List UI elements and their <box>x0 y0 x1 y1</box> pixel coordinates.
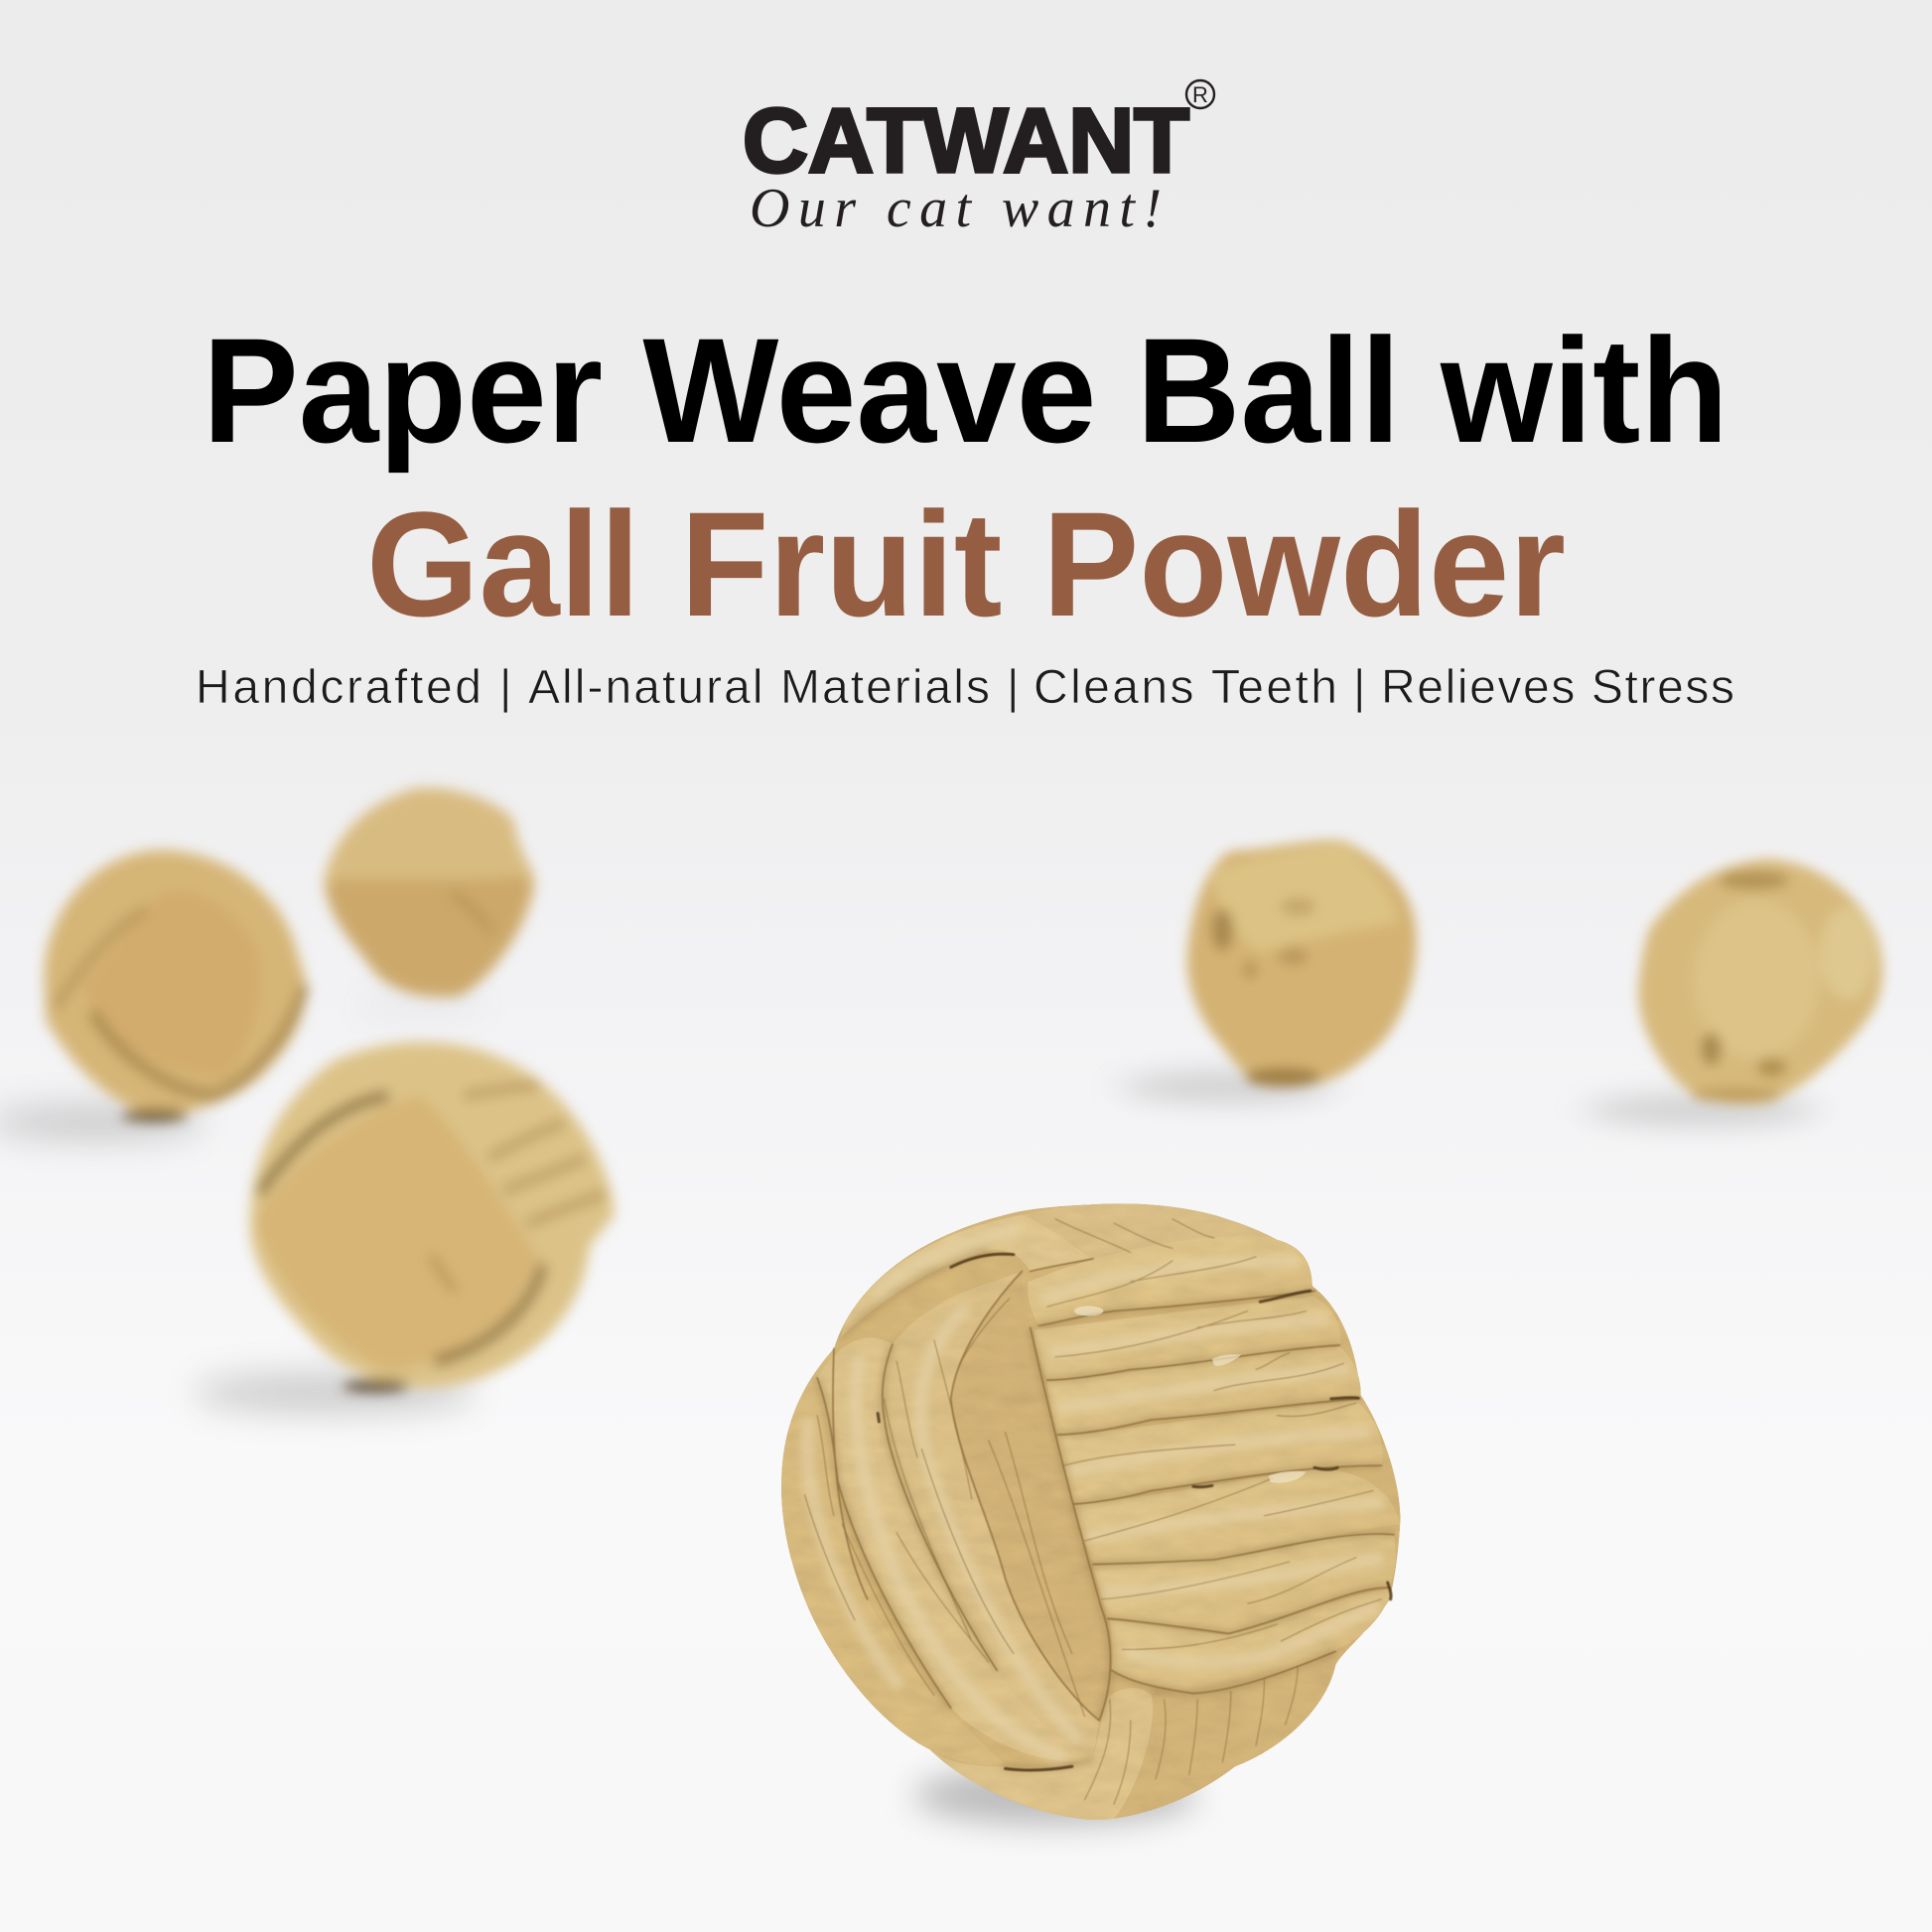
feature list <box>196 661 1734 714</box>
blurred balls, left group <box>0 787 615 1412</box>
strand highlights <box>807 1232 1377 1756</box>
feature list: Cleans Teeth <box>1034 661 1337 714</box>
main paper weave ball <box>781 1203 1400 1820</box>
feature list: Relieves Stress <box>1381 661 1734 714</box>
ball: back right centre <box>1187 840 1417 1087</box>
ball: far right <box>1638 859 1882 1105</box>
strand shadow bands <box>817 1250 1394 1768</box>
ball: back centre <box>324 787 535 997</box>
knot wrap <box>930 1688 1153 1820</box>
registered mark <box>1186 80 1214 108</box>
bottom under strands <box>1114 1654 1335 1819</box>
top back strands <box>1022 1203 1298 1259</box>
shadows, right group <box>1122 1070 1817 1127</box>
left strand B <box>817 1338 1093 1762</box>
title line 2: Gall Fruit Powder <box>366 481 1566 647</box>
soft strand shading <box>807 1232 1394 1768</box>
left strand A <box>883 1271 1099 1758</box>
right wrapped strands <box>1028 1236 1400 1694</box>
registered mark: R <box>1192 82 1208 107</box>
brand logo <box>743 80 1214 239</box>
shadows, left group <box>0 996 493 1412</box>
main ball shadow <box>913 1766 1197 1825</box>
ball silhouette <box>781 1204 1400 1819</box>
weave creases <box>805 1219 1394 1804</box>
logo wordmark: CATWANT <box>743 90 1189 192</box>
front flap <box>951 1271 1111 1721</box>
top left loop <box>840 1215 1093 1338</box>
feature list: | <box>1353 661 1365 714</box>
logo tagline: Our cat want! <box>750 178 1162 239</box>
blurred balls, right group <box>1122 840 1882 1127</box>
left outer strand <box>781 1348 1006 1765</box>
torn paper highlights <box>1074 1306 1307 1483</box>
dark gaps <box>878 1254 1391 1770</box>
ball: back left <box>44 850 306 1122</box>
feature list: | <box>499 661 511 714</box>
feature list: Handcrafted <box>196 661 482 714</box>
feature list: All-natural Materials <box>528 661 990 714</box>
title line 1: Paper Weave Ball with <box>203 307 1728 474</box>
feature list: | <box>1007 661 1019 714</box>
ball: mid left <box>250 1042 615 1392</box>
